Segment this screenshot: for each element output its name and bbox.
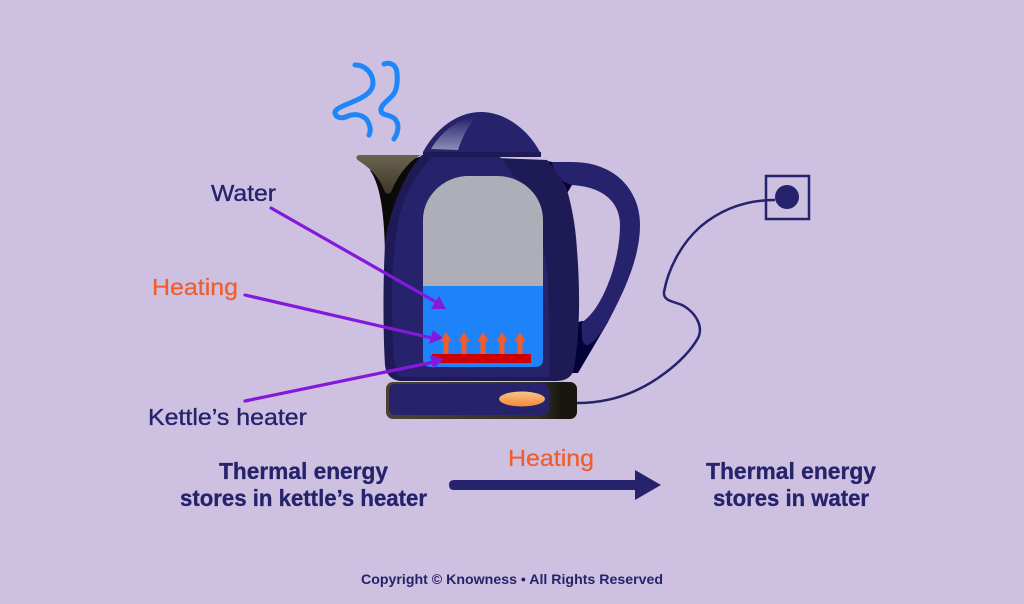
icon: kettle [356, 112, 640, 419]
water [423, 286, 543, 367]
arrow: heater label [245, 355, 444, 401]
icon: wall socket [766, 176, 809, 219]
label: water: Water [211, 180, 276, 206]
heat arrows [440, 332, 526, 354]
label: heating over arrow: Heating [508, 445, 594, 471]
kettle spout [356, 155, 423, 252]
power cord [577, 200, 775, 403]
text: thermal energy in water: stores in water [713, 485, 869, 511]
arrow: heating process [449, 470, 661, 500]
kettle's heater bar [432, 354, 531, 363]
arrow: heating label [245, 295, 443, 344]
text: thermal energy in water: Thermal energy [706, 458, 876, 484]
arrow: water label [271, 208, 446, 309]
kettle body [384, 155, 579, 381]
copyright: Copyright © Knowness • All Rights Reserved [361, 571, 663, 587]
kettle window [423, 176, 543, 286]
label: kettle's heater: Kettle’s heater [148, 404, 307, 430]
text: thermal energy in heater: Thermal energy [219, 458, 388, 484]
kettle base [386, 382, 577, 419]
kettle handle [543, 160, 640, 373]
kettle lid [423, 112, 541, 157]
icon: steam [335, 63, 398, 139]
label: heating: Heating [152, 274, 238, 300]
text: thermal energy in heater: stores in kettle’s heater [180, 485, 427, 511]
